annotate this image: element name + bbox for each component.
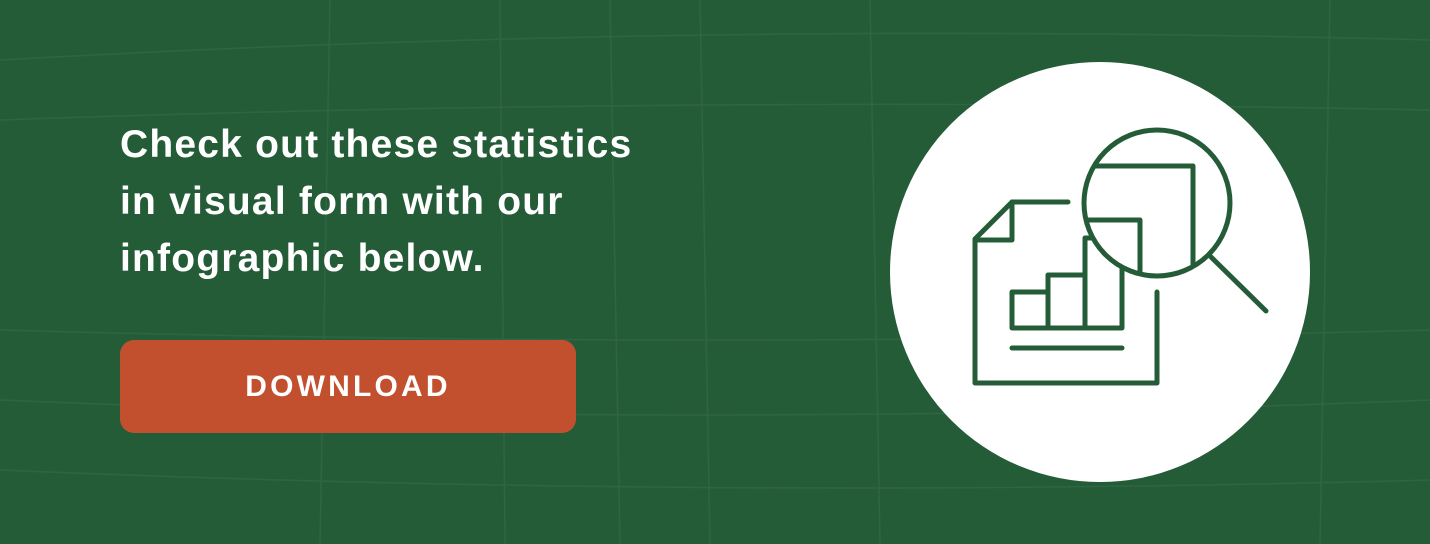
heading text [120, 123, 632, 280]
heading text: in visual form with our [120, 180, 564, 223]
heading text: infographic below. [120, 237, 485, 280]
download button [120, 340, 576, 433]
download button: DOWNLOAD [245, 370, 451, 403]
heading text: Check out these statistics [120, 123, 632, 166]
icon: document chart with magnifier [890, 62, 1310, 482]
